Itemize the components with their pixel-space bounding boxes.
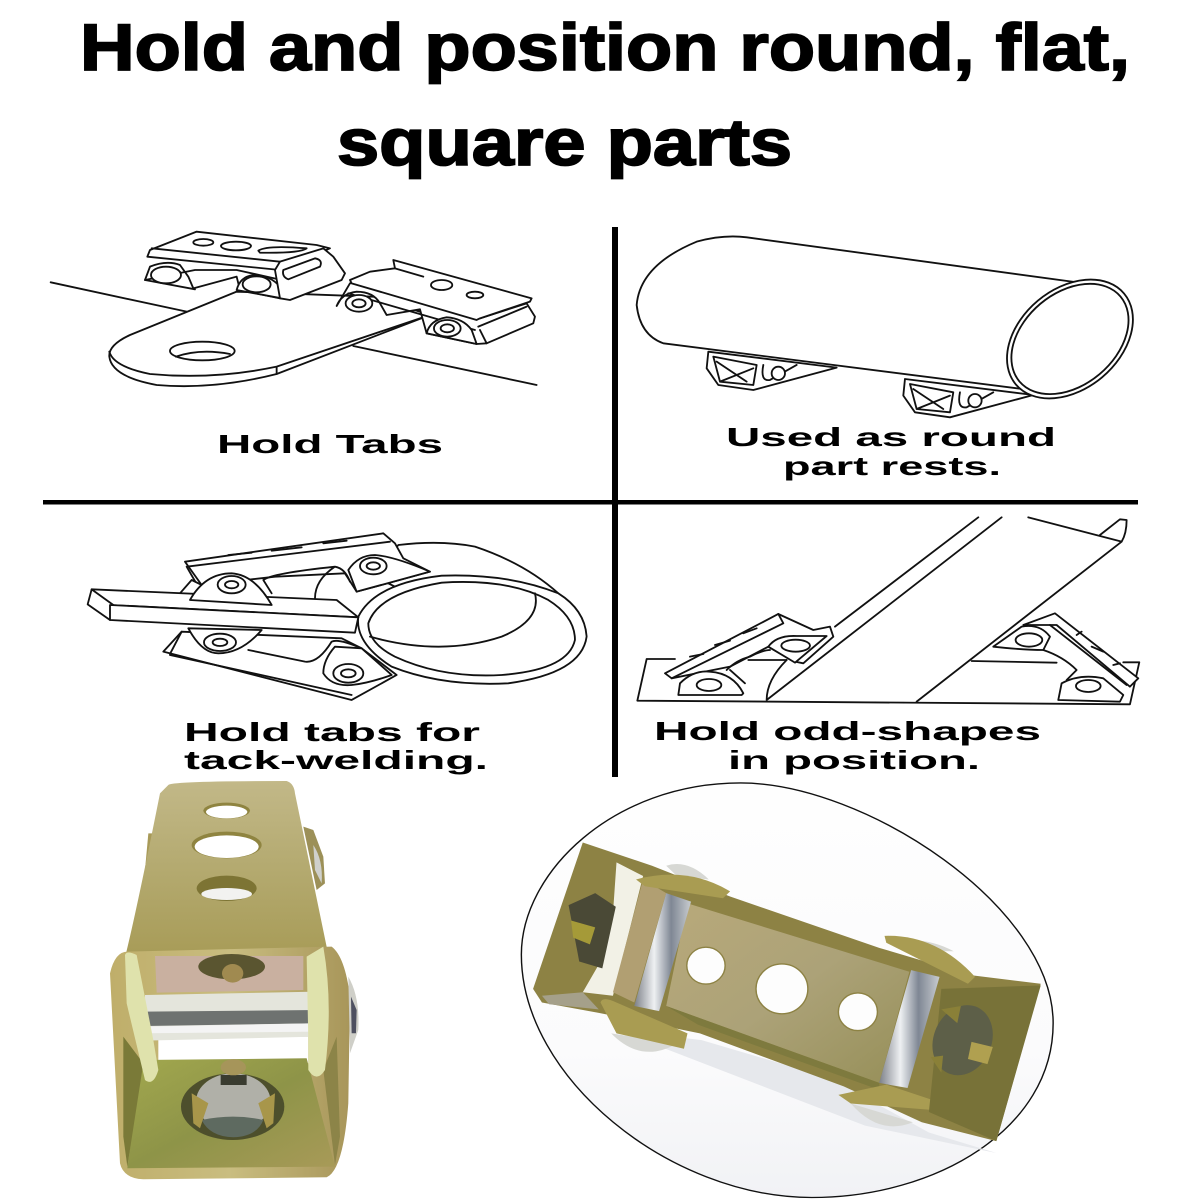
panel: tack welding	[88, 533, 587, 775]
caption: hold odd-shapes in position	[654, 716, 1041, 775]
title	[80, 10, 1130, 179]
caption: hold odd-shapes in position: Hold odd-shapes	[654, 716, 1041, 746]
panel: hold tabs	[51, 232, 537, 459]
caption: hold tabs for tack-welding	[184, 717, 488, 775]
caption: used as round part rests: part rests.	[783, 451, 1001, 481]
illustration: clamps holding tab on ring	[88, 533, 587, 700]
caption: hold tabs: Hold Tabs	[217, 429, 443, 459]
caption: hold tabs for tack-welding: Hold tabs for	[184, 717, 480, 747]
illustration: clamps holding a tab on a bar	[51, 232, 537, 386]
panel: round part rests	[637, 236, 1156, 481]
title: Hold and position round, flat,	[80, 10, 1130, 84]
caption: used as round part rests	[726, 422, 1056, 481]
photo: clamp in oval	[521, 783, 1053, 1198]
title: square parts	[337, 105, 792, 179]
quadrant dividers	[43, 227, 1138, 777]
caption: hold tabs for tack-welding: tack-welding.	[184, 745, 488, 775]
photo: clamp front view	[110, 781, 359, 1179]
panel: odd shapes	[637, 517, 1139, 775]
illustration: angled plate on clamps	[637, 517, 1139, 704]
caption: used as round part rests: Used as round	[726, 422, 1056, 452]
illustration: tube on rests	[637, 236, 1156, 423]
caption: hold odd-shapes in position: in position.	[728, 745, 980, 775]
